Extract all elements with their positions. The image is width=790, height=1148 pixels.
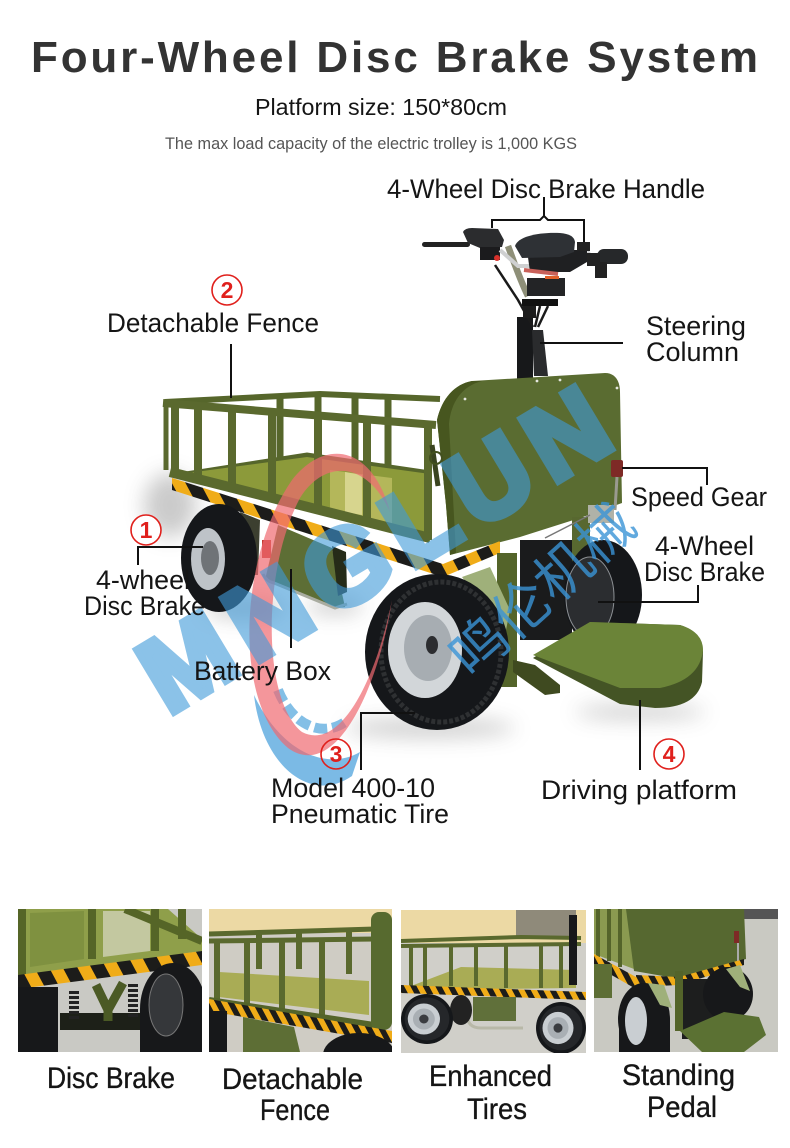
suspension and rear leg [240, 512, 260, 575]
callout 1: left disc brake: Disc Brake [84, 591, 205, 621]
callout: right disc brake: Disc Brake [644, 557, 765, 587]
caption: detachable fence: Detachable [222, 1063, 363, 1096]
near fence [163, 402, 436, 540]
caption: enhanced tires: Enhanced [429, 1060, 552, 1093]
driving platform pedal [513, 622, 703, 708]
title: Four-Wheel Disc Brake System [31, 33, 758, 82]
rear-left wheel [181, 504, 257, 612]
front wheel [365, 574, 509, 730]
callout 2: detachable fence: Detachable Fence [107, 308, 319, 338]
photo: detachable fence [209, 909, 392, 1052]
callout 1: left disc brake [84, 515, 205, 621]
far fence rail and posts [165, 394, 440, 474]
watermark dashed arc [278, 690, 345, 729]
callout: disc brake handle [387, 174, 705, 242]
handlebar [422, 228, 628, 279]
cab panel [437, 373, 622, 555]
callout 4: driving platform: Driving platform [541, 775, 737, 805]
callout: right disc brake: 4-Wheel [655, 531, 754, 561]
right rear wheel with disc brake [564, 540, 642, 650]
latch [432, 445, 438, 486]
callout: disc brake handle: 4-Wheel Disc Brake Handle [387, 174, 705, 204]
callout 2: detachable fence [107, 275, 319, 398]
ground shadows [144, 473, 705, 737]
photo: standing pedal [594, 909, 778, 1052]
subtitle: platform size: Platform size: 150*80cm [255, 94, 507, 120]
electric trolley illustration [144, 228, 705, 737]
description: load capacity: The max load capacity of the electric trolley is 1,000 KGS [165, 134, 577, 153]
callout 3: pneumatic tire: Pneumatic Tire [271, 799, 449, 829]
caption: detachable fence [222, 1063, 363, 1127]
caption: disc brake: Disc Brake [47, 1062, 175, 1095]
hazard stripe [172, 478, 500, 577]
callout 1: left disc brake: 1 [140, 517, 153, 543]
callout 2: detachable fence: 2 [221, 277, 233, 303]
steering column [495, 246, 565, 379]
callout 1: left disc brake: 4-wheel [96, 565, 190, 595]
callout 4: driving platform [541, 700, 737, 805]
callout: battery box [194, 569, 331, 686]
callout: steering column: Column [646, 337, 739, 367]
deck [180, 457, 430, 542]
watermark chinese: 鸣伦机械 [438, 492, 647, 689]
watermark letters: MNGLUN [119, 364, 630, 736]
callout: battery box: Battery Box [194, 656, 331, 686]
callout: right disc brake [598, 531, 765, 602]
callout 4: driving platform: 4 [663, 741, 676, 767]
callout 3: pneumatic tire: 3 [330, 741, 342, 767]
watermark swoosh blue [254, 695, 360, 786]
callout 3: pneumatic tire: Model 400-10 [271, 773, 435, 803]
callout: steering column: Steering [646, 311, 746, 341]
watermark logo [119, 364, 647, 786]
watermark swoosh red [249, 454, 392, 755]
photo: disc brake [18, 909, 202, 1052]
caption: enhanced tires: Tires [467, 1093, 527, 1126]
battery box [265, 525, 345, 608]
chassis legs [497, 505, 614, 687]
speed gear knob [611, 460, 623, 510]
callout: speed gear [622, 468, 767, 512]
caption: standing pedal: Standing [622, 1059, 735, 1092]
photo: enhanced tires [401, 910, 586, 1053]
callout 3: pneumatic tire [271, 713, 449, 829]
caption: detachable fence: Fence [260, 1094, 330, 1127]
caption: enhanced tires [429, 1060, 552, 1126]
caption: standing pedal: Pedal [647, 1091, 717, 1124]
caption: standing pedal [622, 1059, 735, 1124]
callout: steering column [540, 311, 746, 367]
callout: speed gear: Speed Gear [631, 482, 767, 512]
fender [462, 567, 510, 635]
